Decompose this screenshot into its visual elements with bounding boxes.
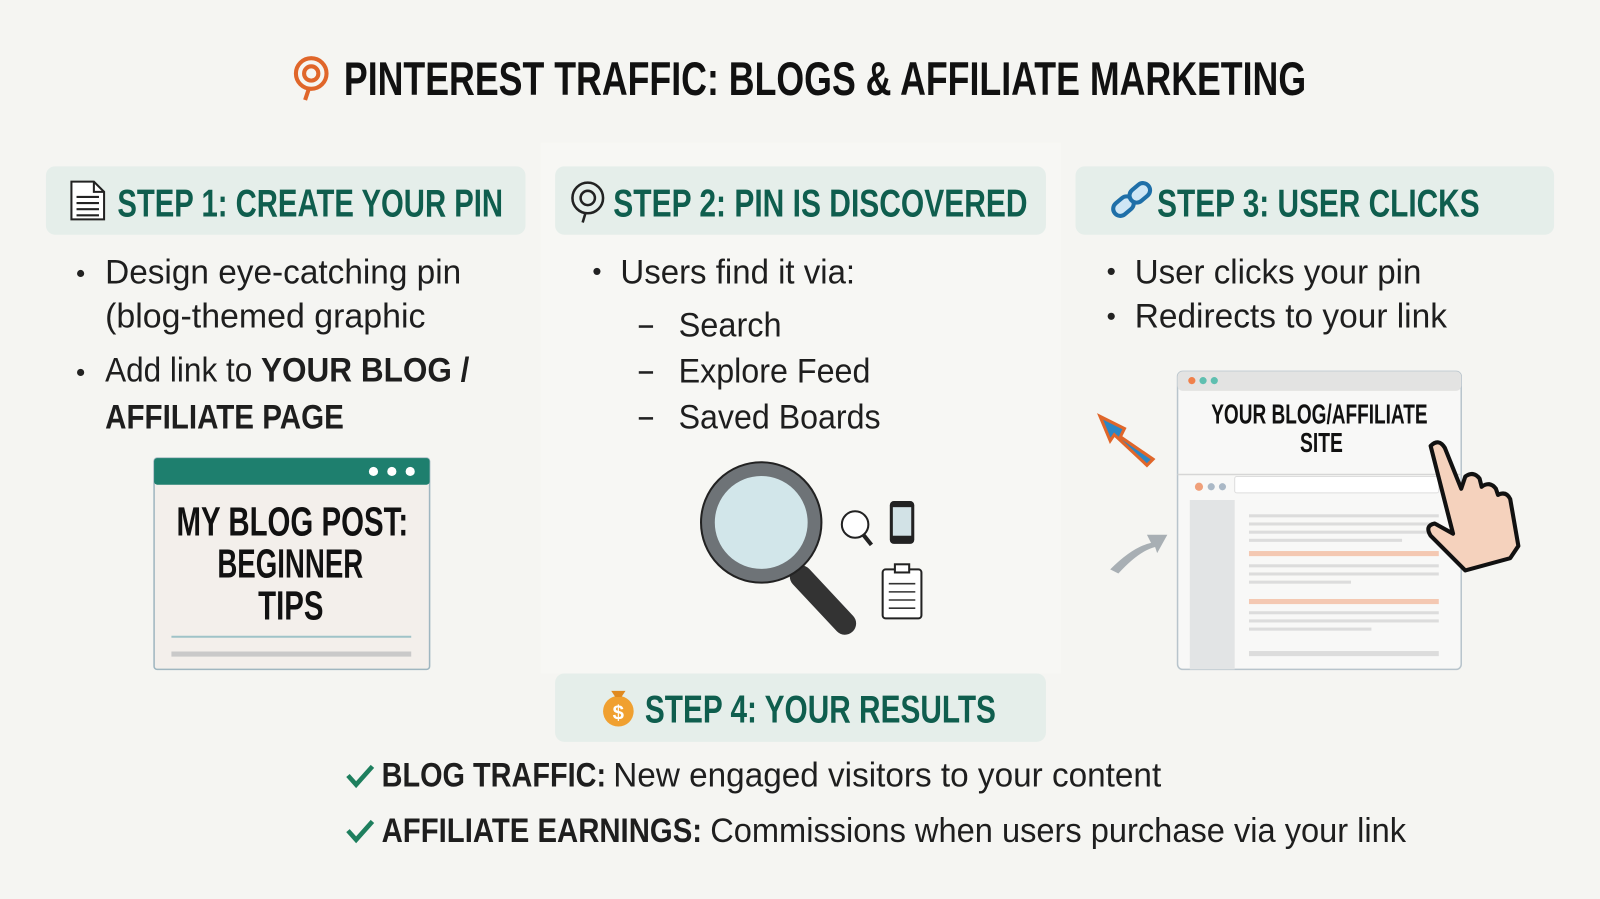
blog post mockup <box>154 458 430 669</box>
text: step 1 bullets: AFFILIATE PAGE <box>105 399 344 437</box>
blog post mockup: TIPS <box>258 582 323 628</box>
icon: money bag: $ <box>613 702 625 724</box>
text: step 2 bullets: Explore Feed <box>679 353 870 391</box>
header: step 1: STEP 1: CREATE YOUR PIN <box>117 182 503 225</box>
header: step 4 <box>555 673 1046 742</box>
icon: document <box>71 182 104 219</box>
icon: pinterest pin <box>296 58 327 100</box>
results list: BLOG TRAFFIC: <box>382 757 606 795</box>
text: step 2 bullets: Search <box>679 307 782 345</box>
title: PINTEREST TRAFFIC: BLOGS & AFFILIATE MARKETING <box>344 53 1306 105</box>
arrow: grey redirect arrow <box>1110 535 1167 573</box>
header: step 3: STEP 3: USER CLICKS <box>1157 182 1480 225</box>
icon: magnifier with small icons <box>701 462 921 623</box>
text: step 1 bullets: (blog-themed graphic <box>105 298 426 336</box>
results list <box>348 757 1407 850</box>
icon: money bag <box>603 691 634 727</box>
arrow: blue click arrow <box>1100 416 1153 465</box>
text: step 2 bullets <box>593 254 881 437</box>
header: step 2 <box>555 166 1046 235</box>
results list: AFFILIATE EARNINGS: <box>382 812 702 850</box>
header: step 3 <box>1076 166 1554 235</box>
text: step 3 bullets <box>1108 254 1448 336</box>
results list: Commissions when users purchase via your link <box>710 812 1407 850</box>
blog post mockup: BEGINNER <box>217 541 363 587</box>
text: step 1 bullets <box>77 254 470 437</box>
text: step 2 bullets: Users find it via: <box>620 254 855 292</box>
text: step 3 bullets: User clicks your pin <box>1135 254 1421 292</box>
header: step 4: STEP 4: YOUR RESULTS <box>645 688 996 731</box>
site mockup with cursor hand: SITE <box>1300 427 1343 458</box>
text: step 3 bullets: Redirects to your link <box>1135 298 1448 336</box>
text: step 2 bullets: Saved Boards <box>679 399 881 437</box>
results list: New engaged visitors to your content <box>613 757 1162 795</box>
site mockup with cursor hand: YOUR BLOG/AFFILIATE <box>1211 398 1428 429</box>
icon: pin <box>572 183 603 222</box>
text: step 1 bullets: Design eye-catching pin <box>105 254 461 292</box>
header: step 1 <box>46 166 526 235</box>
icon: link <box>1110 180 1153 219</box>
site mockup with cursor hand <box>1178 371 1518 669</box>
text: step 1 bullets: Add link to YOUR BLOG / <box>105 352 470 390</box>
blog post mockup: MY BLOG POST: <box>177 499 408 545</box>
header: step 2: STEP 2: PIN IS DISCOVERED <box>613 182 1028 225</box>
